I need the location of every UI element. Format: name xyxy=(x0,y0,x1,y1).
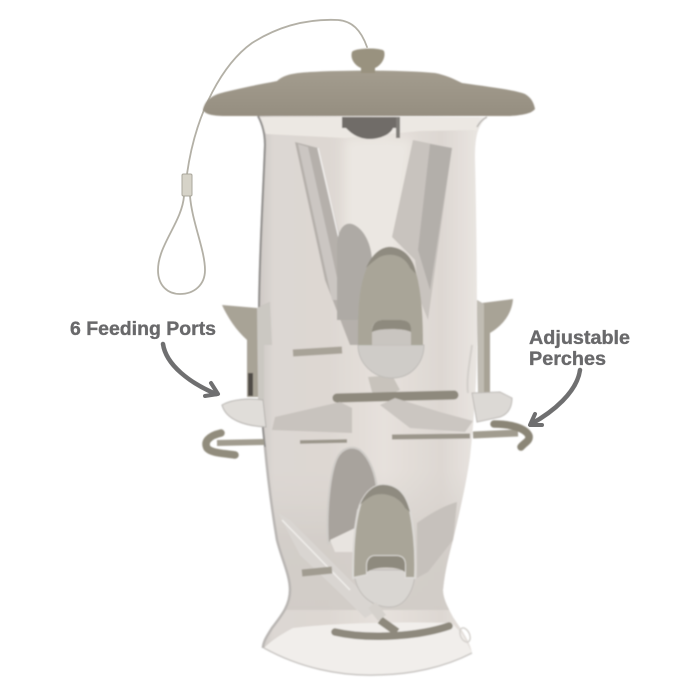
arrow: feeding ports xyxy=(163,344,218,396)
top bracket xyxy=(342,117,398,139)
lid knob xyxy=(351,48,385,73)
hanging wire loop xyxy=(158,20,367,294)
upper port bowl xyxy=(358,345,424,378)
upper tube right xyxy=(392,140,452,320)
feeder tube body xyxy=(203,48,535,675)
lower perch xyxy=(335,626,449,636)
arrow: adjustable perches xyxy=(530,370,580,425)
right bowl xyxy=(472,392,512,422)
callout: Adjustable Perches: Perches xyxy=(529,349,606,370)
callout: Adjustable Perches: Adjustable xyxy=(529,328,630,349)
right flare edge xyxy=(477,117,487,127)
upper back port xyxy=(337,224,372,320)
base flare xyxy=(264,623,472,675)
callout: Adjustable Perches xyxy=(529,328,630,425)
upper tube left xyxy=(295,142,362,345)
upper perch rod xyxy=(337,395,454,398)
left perch xyxy=(206,433,264,455)
wire sleeve xyxy=(182,174,192,196)
callout: 6 Feeding Ports: 6 Feeding Ports xyxy=(70,319,216,340)
central connector xyxy=(368,375,400,398)
left body edge xyxy=(258,116,265,447)
lower stem xyxy=(380,620,397,632)
left bowl xyxy=(222,399,266,427)
lower back port xyxy=(327,448,377,543)
lower right leaf xyxy=(417,502,457,578)
lower front port xyxy=(353,485,415,578)
mid-left rod xyxy=(293,350,342,353)
serrated rods xyxy=(300,441,347,442)
upper front port xyxy=(358,248,423,345)
middle fin left xyxy=(272,402,352,433)
right perch xyxy=(473,424,529,447)
callout: 6 Feeding Ports xyxy=(70,319,218,396)
lower port bowl xyxy=(354,570,415,607)
middle fin right xyxy=(380,398,473,432)
lower left diagonal xyxy=(278,513,378,618)
lid xyxy=(203,71,535,116)
infographic: bird feeder xyxy=(70,18,630,676)
right side port xyxy=(477,299,513,393)
left side port xyxy=(222,302,270,397)
inner shading xyxy=(255,117,480,610)
